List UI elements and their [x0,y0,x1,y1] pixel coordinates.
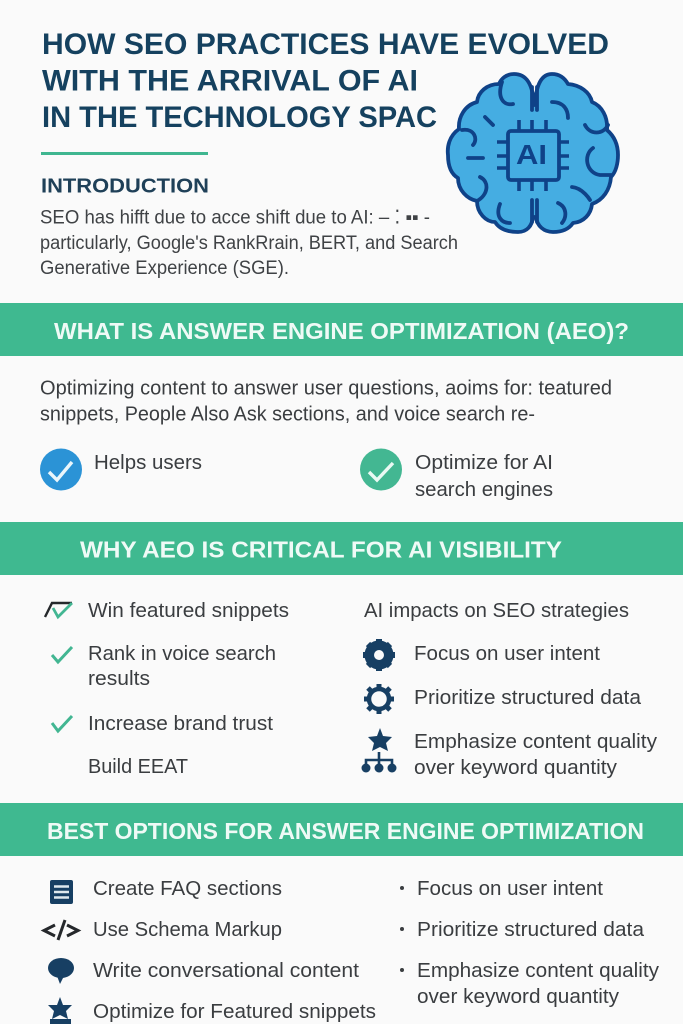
icon: AI brain [448,74,618,232]
list: AEO benefits: Rank in voice search [88,643,276,665]
icon: AI brain: AI [516,139,547,170]
list: best options: Use Schema Markup [93,919,282,941]
list: AI impacts on SEO strategies: Focus on user intent [414,643,600,665]
title [42,28,609,134]
list: AEO benefits: Win featured snippets [88,600,289,622]
list: best options: Optimize for Featured snippets [93,1001,376,1023]
text block: AEO description [40,378,612,426]
list: AI impacts on SEO strategies: Prioritize structured data [414,687,642,709]
list: best options: Write conversational content [93,960,359,982]
list: AI impacts on SEO strategies: Emphasize content quality [414,731,657,753]
icon: green check [360,448,402,490]
list: AEO benefits: Build EEAT [88,756,188,778]
panel: best options banner [0,803,683,856]
item: optimize for AI [360,448,553,501]
panel: best options banner: BEST OPTIONS FOR ANSWER ENGINE OPTIMIZATION [47,818,644,844]
list: best options right column: Prioritize structured data [417,919,645,941]
item: optimize for AI: search engines [415,479,553,501]
panel: why AEO banner: WHY AEO IS CRITICAL FOR AI VISIBILITY [80,536,562,562]
item: helps users [40,448,202,490]
list: AI impacts on SEO strategies: over keyword quantity [414,757,617,779]
icon: FAQ document [50,880,73,904]
panel: what is AEO banner [0,303,683,356]
list: best options: Create FAQ sections [93,878,282,900]
icon: star hierarchy [362,728,396,772]
panel: why AEO banner [0,522,683,575]
list: AEO benefits: results [88,668,150,690]
icon: outline gear [364,684,394,714]
text block: introduction body: SEO has hifft due to acce shift due to AI: – ⁚ ▪▪ - [40,208,430,228]
icon: blue check [40,448,82,490]
text block: introduction body [40,208,458,279]
title: WITH THE ARRIVAL OF AI [42,64,418,98]
item: optimize for AI: Optimize for AI [415,452,553,474]
icon: check [52,716,72,731]
list: AI impacts on SEO strategies [362,600,657,779]
panel: what is AEO banner: WHAT IS ANSWER ENGINE OPTIMIZATION (AEO)? [54,318,629,344]
list: best options right column: Emphasize content quality [417,960,659,982]
list: best options right column: over keyword quantity [417,986,619,1008]
list: best options [44,878,376,1024]
icon: speech bubble [48,958,74,984]
list: AEO benefits: Increase brand trust [88,713,273,735]
title: HOW SEO PRACTICES HAVE EVOLVED [42,28,609,61]
text block: introduction body: particularly, Google's RankRrain, BERT, and Search [40,233,458,254]
icon: solid gear [363,639,395,671]
text block: introduction body: Generative Experience (SGE). [40,258,289,279]
text block: AEO description: snippets, People Also Ask sections, and voice search re- [40,404,535,426]
icon: star badge [48,997,72,1024]
list: AI impacts on SEO strategies: AI impacts on SEO strategies [364,600,629,622]
list: best options right column: Focus on user intent [417,878,603,900]
list: best options right column [400,878,659,1008]
item: helps users: Helps users [94,452,202,474]
icon: check [52,647,72,662]
list: AEO benefits [45,600,289,778]
icon: chart check [45,603,72,617]
title: IN THE TECHNOLOGY SPAC [42,101,437,134]
icon: code tag [44,920,78,940]
heading: introduction: INTRODUCTION [41,174,209,198]
text block: AEO description: Optimizing content to answer user questions, aoims for: teatured [40,378,612,400]
